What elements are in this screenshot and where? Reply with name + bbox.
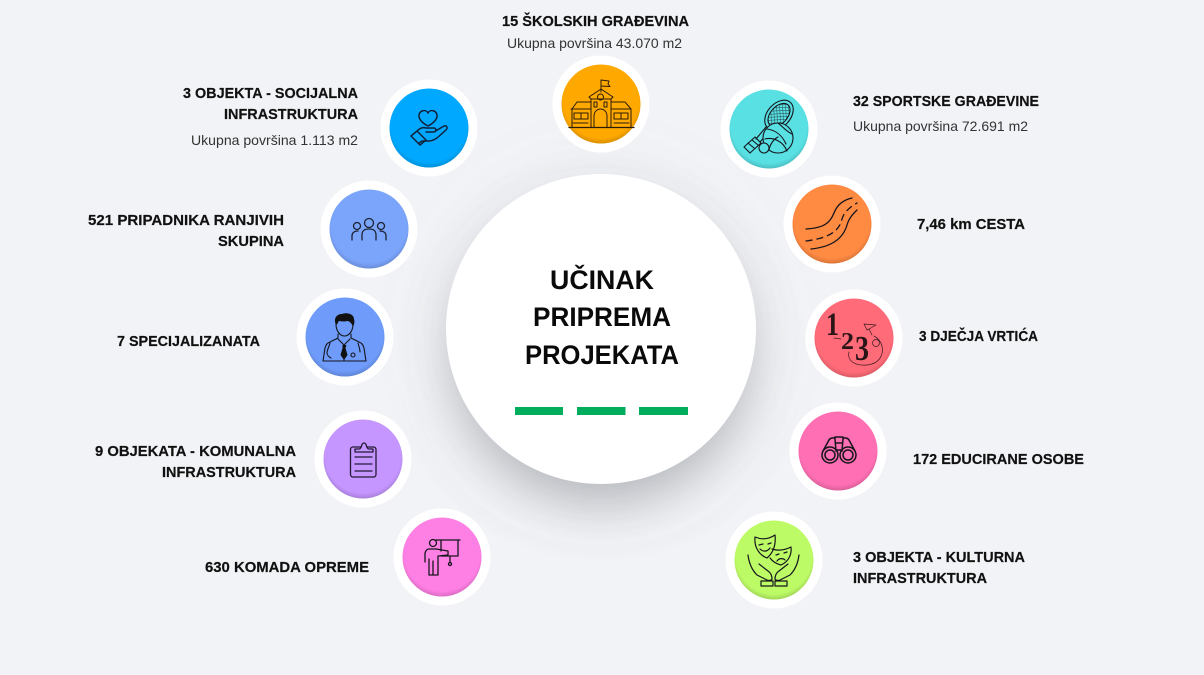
icon: racket and ball: [720, 80, 818, 178]
central title: [525, 264, 679, 370]
label: communal infrastructure: 9 OBJEKATA - KOMUNALNA: [95, 443, 296, 460]
label: roads: 7,46 km CESTA: [917, 216, 1025, 233]
item: equipment: [205, 508, 490, 606]
icon: 1 2 3: 1: [826, 307, 839, 343]
item: cultural infrastructure: [726, 512, 1025, 608]
label: sports buildings: [853, 93, 1039, 134]
label: vulnerable groups: [88, 212, 284, 250]
icon: theatre masks and hands: [726, 512, 822, 608]
item: vulnerable groups: [88, 180, 418, 278]
label: cultural infrastructure: INFRASTRUKTURA: [853, 570, 987, 587]
label: social infrastructure: [183, 85, 358, 148]
item: social infrastructure: [183, 80, 478, 176]
item: sports buildings: [720, 80, 1039, 178]
label: sports buildings: Ukupna površina 72.691 m2: [853, 118, 1028, 134]
label: educated persons: 172 EDUCIRANE OSOBE: [913, 451, 1084, 468]
icon: people: [320, 180, 418, 278]
icon: 1 2 3: 2: [841, 329, 854, 355]
label: vulnerable groups: SKUPINA: [218, 233, 284, 250]
item: specialists: [117, 288, 394, 386]
label: communal infrastructure: INFRASTRUKTURA: [162, 464, 296, 481]
label: school buildings: [502, 12, 689, 51]
icon: clipboard: [314, 410, 412, 508]
icon: doctor: [296, 288, 394, 386]
label: sports buildings: 32 SPORTSKE GRAĐEVINE: [853, 93, 1039, 110]
item: educated persons: [790, 402, 1084, 500]
central circle: [436, 170, 766, 504]
icon: 1 2 3: 3: [855, 329, 869, 368]
icon: presenter at board: [394, 508, 490, 606]
label: equipment: 630 KOMADA OPREME: [205, 559, 369, 576]
label: school buildings: Ukupna površina 43.070 m2: [507, 35, 682, 51]
icon: 1 2 3: [806, 290, 902, 386]
icon: binoculars: [790, 402, 886, 500]
label: specialists: 7 SPECIJALIZANATA: [117, 333, 260, 350]
central title: UČINAK: [550, 264, 654, 295]
icon: road: [784, 176, 880, 272]
label: kindergartens: 3 DJEČJA VRTIĆA: [919, 327, 1038, 345]
label: vulnerable groups: 521 PRIPADNIKA RANJIVIH: [88, 212, 284, 229]
central title: PRIPREMA: [533, 302, 671, 332]
green dashes: [515, 407, 688, 415]
label: school buildings: 15 ŠKOLSKIH GRAĐEVINA: [502, 12, 689, 30]
item: roads: [784, 176, 1025, 272]
icon: heart in hand: [380, 80, 478, 176]
item: communal infrastructure: [95, 410, 412, 508]
label: cultural infrastructure: [853, 549, 1025, 587]
item: school buildings: [502, 12, 689, 152]
item: kindergartens: [806, 290, 1038, 386]
label: social infrastructure: 3 OBJEKTA - SOCIJALNA: [183, 85, 358, 102]
icon: school: [552, 56, 650, 152]
label: social infrastructure: Ukupna površina 1.113 m2: [191, 132, 358, 148]
label: communal infrastructure: [95, 443, 296, 481]
central title: PROJEKATA: [525, 340, 679, 370]
label: social infrastructure: INFRASTRUKTURA: [224, 106, 358, 123]
label: cultural infrastructure: 3 OBJEKTA - KULTURNA: [853, 549, 1025, 566]
